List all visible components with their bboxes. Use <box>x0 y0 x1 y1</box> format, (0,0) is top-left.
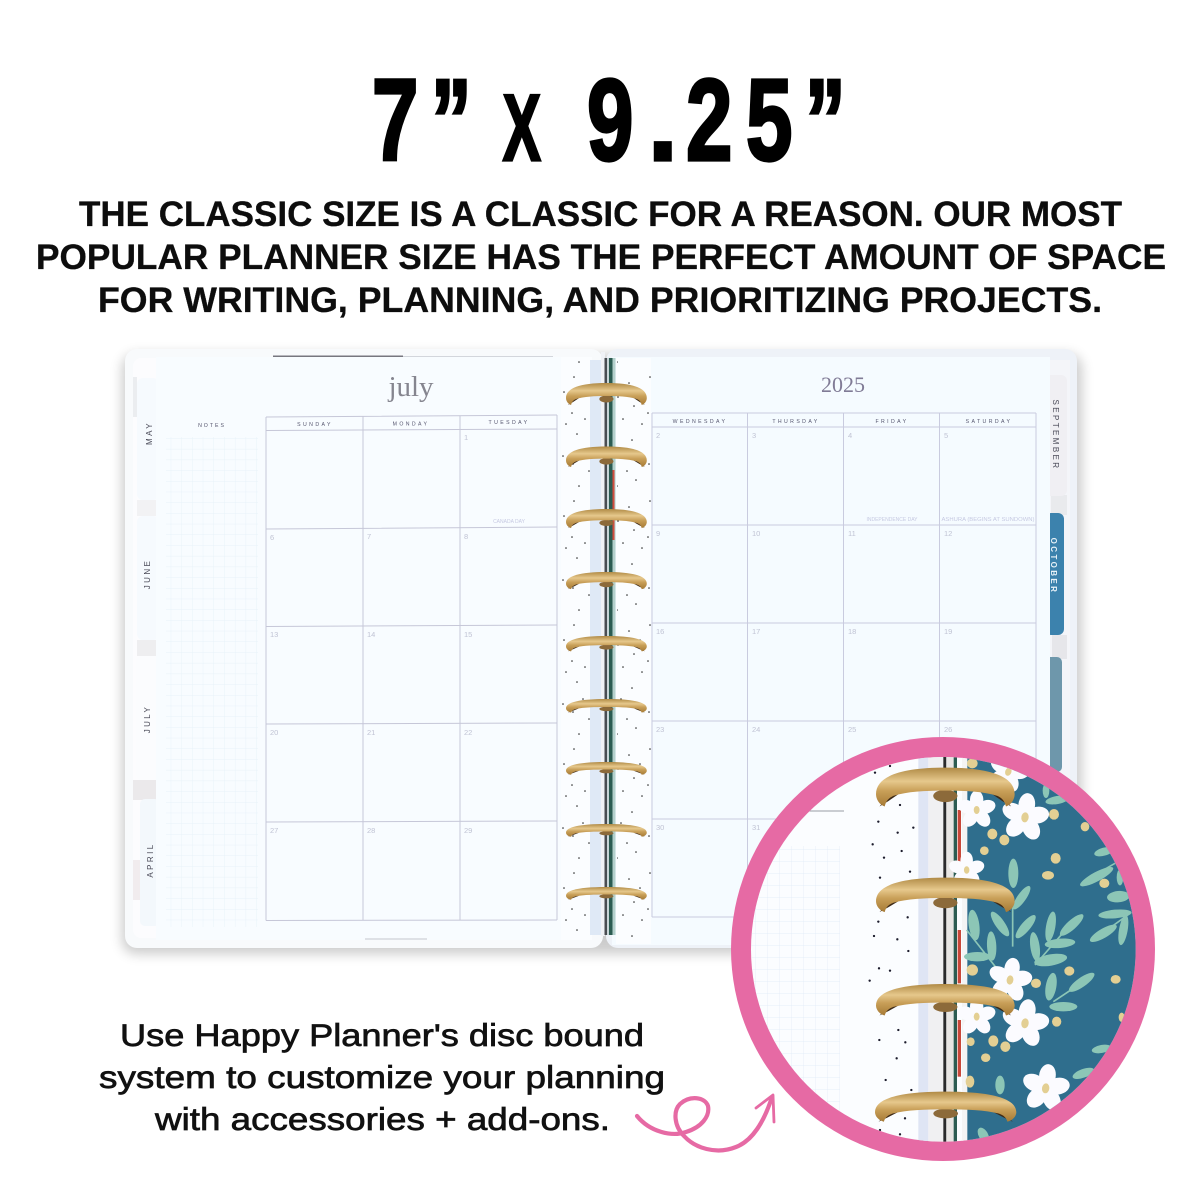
inset spine stack <box>918 750 967 1150</box>
inset floral cover <box>949 758 1136 1140</box>
title: . <box>648 55 678 185</box>
weekday labels right: THURSDAY <box>772 419 820 425</box>
tab: July <box>136 656 160 780</box>
leaves <box>964 783 1132 1144</box>
flowers <box>947 745 1075 1116</box>
date numbers right: 10 <box>752 529 760 538</box>
inset rings <box>875 768 1016 1122</box>
notes grid <box>166 437 258 927</box>
title: 9 <box>587 57 633 185</box>
date numbers right: 16 <box>656 627 664 636</box>
date numbers left: 27 <box>270 826 278 835</box>
date numbers left: 22 <box>464 728 472 737</box>
date numbers left: CANADA DAY <box>493 519 526 525</box>
planner shadow <box>122 354 1082 954</box>
date numbers left: 21 <box>367 728 375 737</box>
headline text block: FOR WRITING, PLANNING, AND PRIORITIZING PROJECTS. <box>98 281 1102 320</box>
title: ” <box>805 56 846 185</box>
date numbers right: 19 <box>944 627 952 636</box>
body text block: system to customize your planning <box>99 1059 665 1095</box>
date numbers right: INDEPENDENCE DAY <box>866 517 918 523</box>
inset notes grid <box>743 846 840 1113</box>
date numbers right: 31 <box>752 823 760 832</box>
calendar grid left <box>266 415 557 920</box>
date numbers right: 18 <box>848 627 856 636</box>
date numbers left <box>270 433 526 835</box>
date numbers right: 26 <box>944 725 952 734</box>
tab: April: APRIL <box>146 842 155 878</box>
tab: October <box>1045 513 1064 635</box>
date numbers left: 28 <box>367 826 375 835</box>
date numbers right: 17 <box>752 627 760 636</box>
date numbers right: 24 <box>752 725 760 734</box>
date numbers right: 25 <box>848 725 856 734</box>
headline text block: THE CLASSIC SIZE IS A CLASSIC FOR A REASON. OUR MOST <box>79 195 1122 234</box>
date numbers left: 8 <box>464 532 468 541</box>
tab: May <box>137 378 159 500</box>
date numbers left: 20 <box>270 728 278 737</box>
date numbers right: 11 <box>848 529 856 538</box>
inset dots <box>868 765 914 1135</box>
date numbers right: 12 <box>944 529 952 538</box>
inset page background <box>751 757 1136 1142</box>
date numbers left: 13 <box>270 630 278 639</box>
headline text block: POPULAR PLANNER SIZE HAS THE PERFECT AMOUNT OF SPACE <box>36 238 1166 277</box>
weekday labels right: WEDNESDAY <box>673 419 727 425</box>
date numbers right: 5 <box>944 431 948 440</box>
inset circle: cover close-up <box>731 737 1155 1161</box>
year title: 2025 <box>821 372 865 397</box>
tab: June <box>137 516 159 640</box>
weekday labels left <box>297 420 529 428</box>
date numbers right <box>656 431 1035 832</box>
body text block: with accessories + add-ons. <box>154 1101 610 1137</box>
title <box>372 55 846 185</box>
title: 5 <box>746 57 792 185</box>
binding rings <box>566 383 647 900</box>
weekday labels right <box>673 419 1012 425</box>
gold dots <box>966 758 1125 1088</box>
tab: blue-grey <box>1045 657 1062 772</box>
spine with dotted margins <box>561 352 651 944</box>
body text block: Use Happy Planner's disc bound <box>120 1017 644 1053</box>
planner <box>125 349 1077 948</box>
date numbers right: 9 <box>656 529 660 538</box>
weekday labels right: FRIDAY <box>875 419 909 425</box>
date numbers left: 14 <box>367 630 375 639</box>
date numbers left: 6 <box>270 533 274 542</box>
headline text block <box>36 195 1166 320</box>
title: 7 <box>372 57 418 185</box>
title: ” <box>431 56 472 185</box>
arrow <box>637 1095 774 1150</box>
title: X <box>503 76 541 181</box>
date numbers right: 23 <box>656 725 664 734</box>
date numbers left: 15 <box>464 630 472 639</box>
left page <box>156 356 592 940</box>
body text block <box>99 1017 665 1137</box>
month title: july: july <box>387 371 434 403</box>
weekday labels left: TUESDAY <box>489 420 529 426</box>
date numbers left: 7 <box>367 532 371 541</box>
tab: May: MAY <box>145 421 154 445</box>
weekday labels left: MONDAY <box>393 422 429 428</box>
weekday labels left: SUNDAY <box>297 422 333 428</box>
tab: October: OCTOBER <box>1049 538 1058 594</box>
tab: September <box>1045 375 1067 496</box>
date numbers right: 3 <box>752 431 756 440</box>
date numbers left: 1 <box>464 433 468 442</box>
right cover <box>606 349 1077 948</box>
notes heading: NOTES <box>198 423 226 429</box>
left cover <box>125 349 603 948</box>
title: 2 <box>686 57 732 185</box>
date numbers right: 4 <box>848 431 852 440</box>
date numbers right: 30 <box>656 823 664 832</box>
right page <box>612 357 1050 945</box>
weekday labels right: SATURDAY <box>966 419 1012 425</box>
tab: April <box>140 799 160 926</box>
date numbers right: ASHURA (BEGINS AT SUNDOWN) <box>942 517 1035 523</box>
tab: June: JUNE <box>143 559 152 589</box>
calendar grid right <box>652 413 1036 917</box>
tab: July: JULY <box>143 705 152 733</box>
tab: September: SEPTEMBER <box>1051 400 1060 470</box>
date numbers right: 2 <box>656 431 660 440</box>
date numbers left: 29 <box>464 826 472 835</box>
